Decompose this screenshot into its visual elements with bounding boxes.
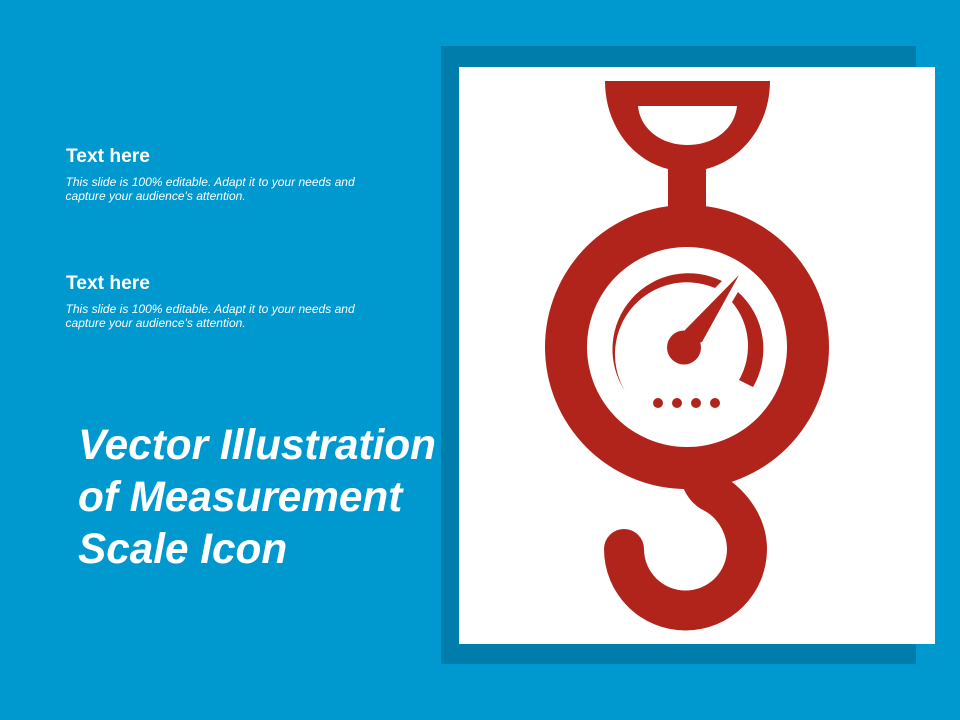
title: [78, 420, 436, 572]
icon part: gauge needle: [684, 275, 739, 347]
panel: white image card: [459, 67, 935, 644]
heading: first text block: Text here: [66, 146, 150, 167]
icon part: top handle and stem: [605, 81, 770, 215]
icon part: gauge arc right: [732, 292, 763, 387]
icon part: hook: [604, 482, 767, 630]
title: of Measurement: [78, 472, 402, 520]
text block: second description: This slide is 100% editable. Adapt it to your needs and: [66, 302, 355, 316]
text block: first description: capture your audience's attention.: [66, 189, 246, 203]
text block: second description: [66, 302, 355, 330]
icon part: scale ring: [545, 205, 829, 489]
text block: first description: [66, 175, 355, 203]
text block: second description: capture your audience's attention.: [66, 316, 246, 330]
text block: first description: This slide is 100% editable. Adapt it to your needs and: [66, 175, 355, 189]
title: Scale Icon: [78, 524, 287, 572]
icon part: four dots: [653, 398, 720, 408]
icon part: gauge hub: [667, 330, 701, 364]
heading: second text block: Text here: [66, 273, 150, 294]
panel: shadow backdrop: [441, 46, 916, 664]
title: Vector Illustration: [78, 420, 436, 468]
icon part: gauge arc left: [612, 273, 722, 391]
